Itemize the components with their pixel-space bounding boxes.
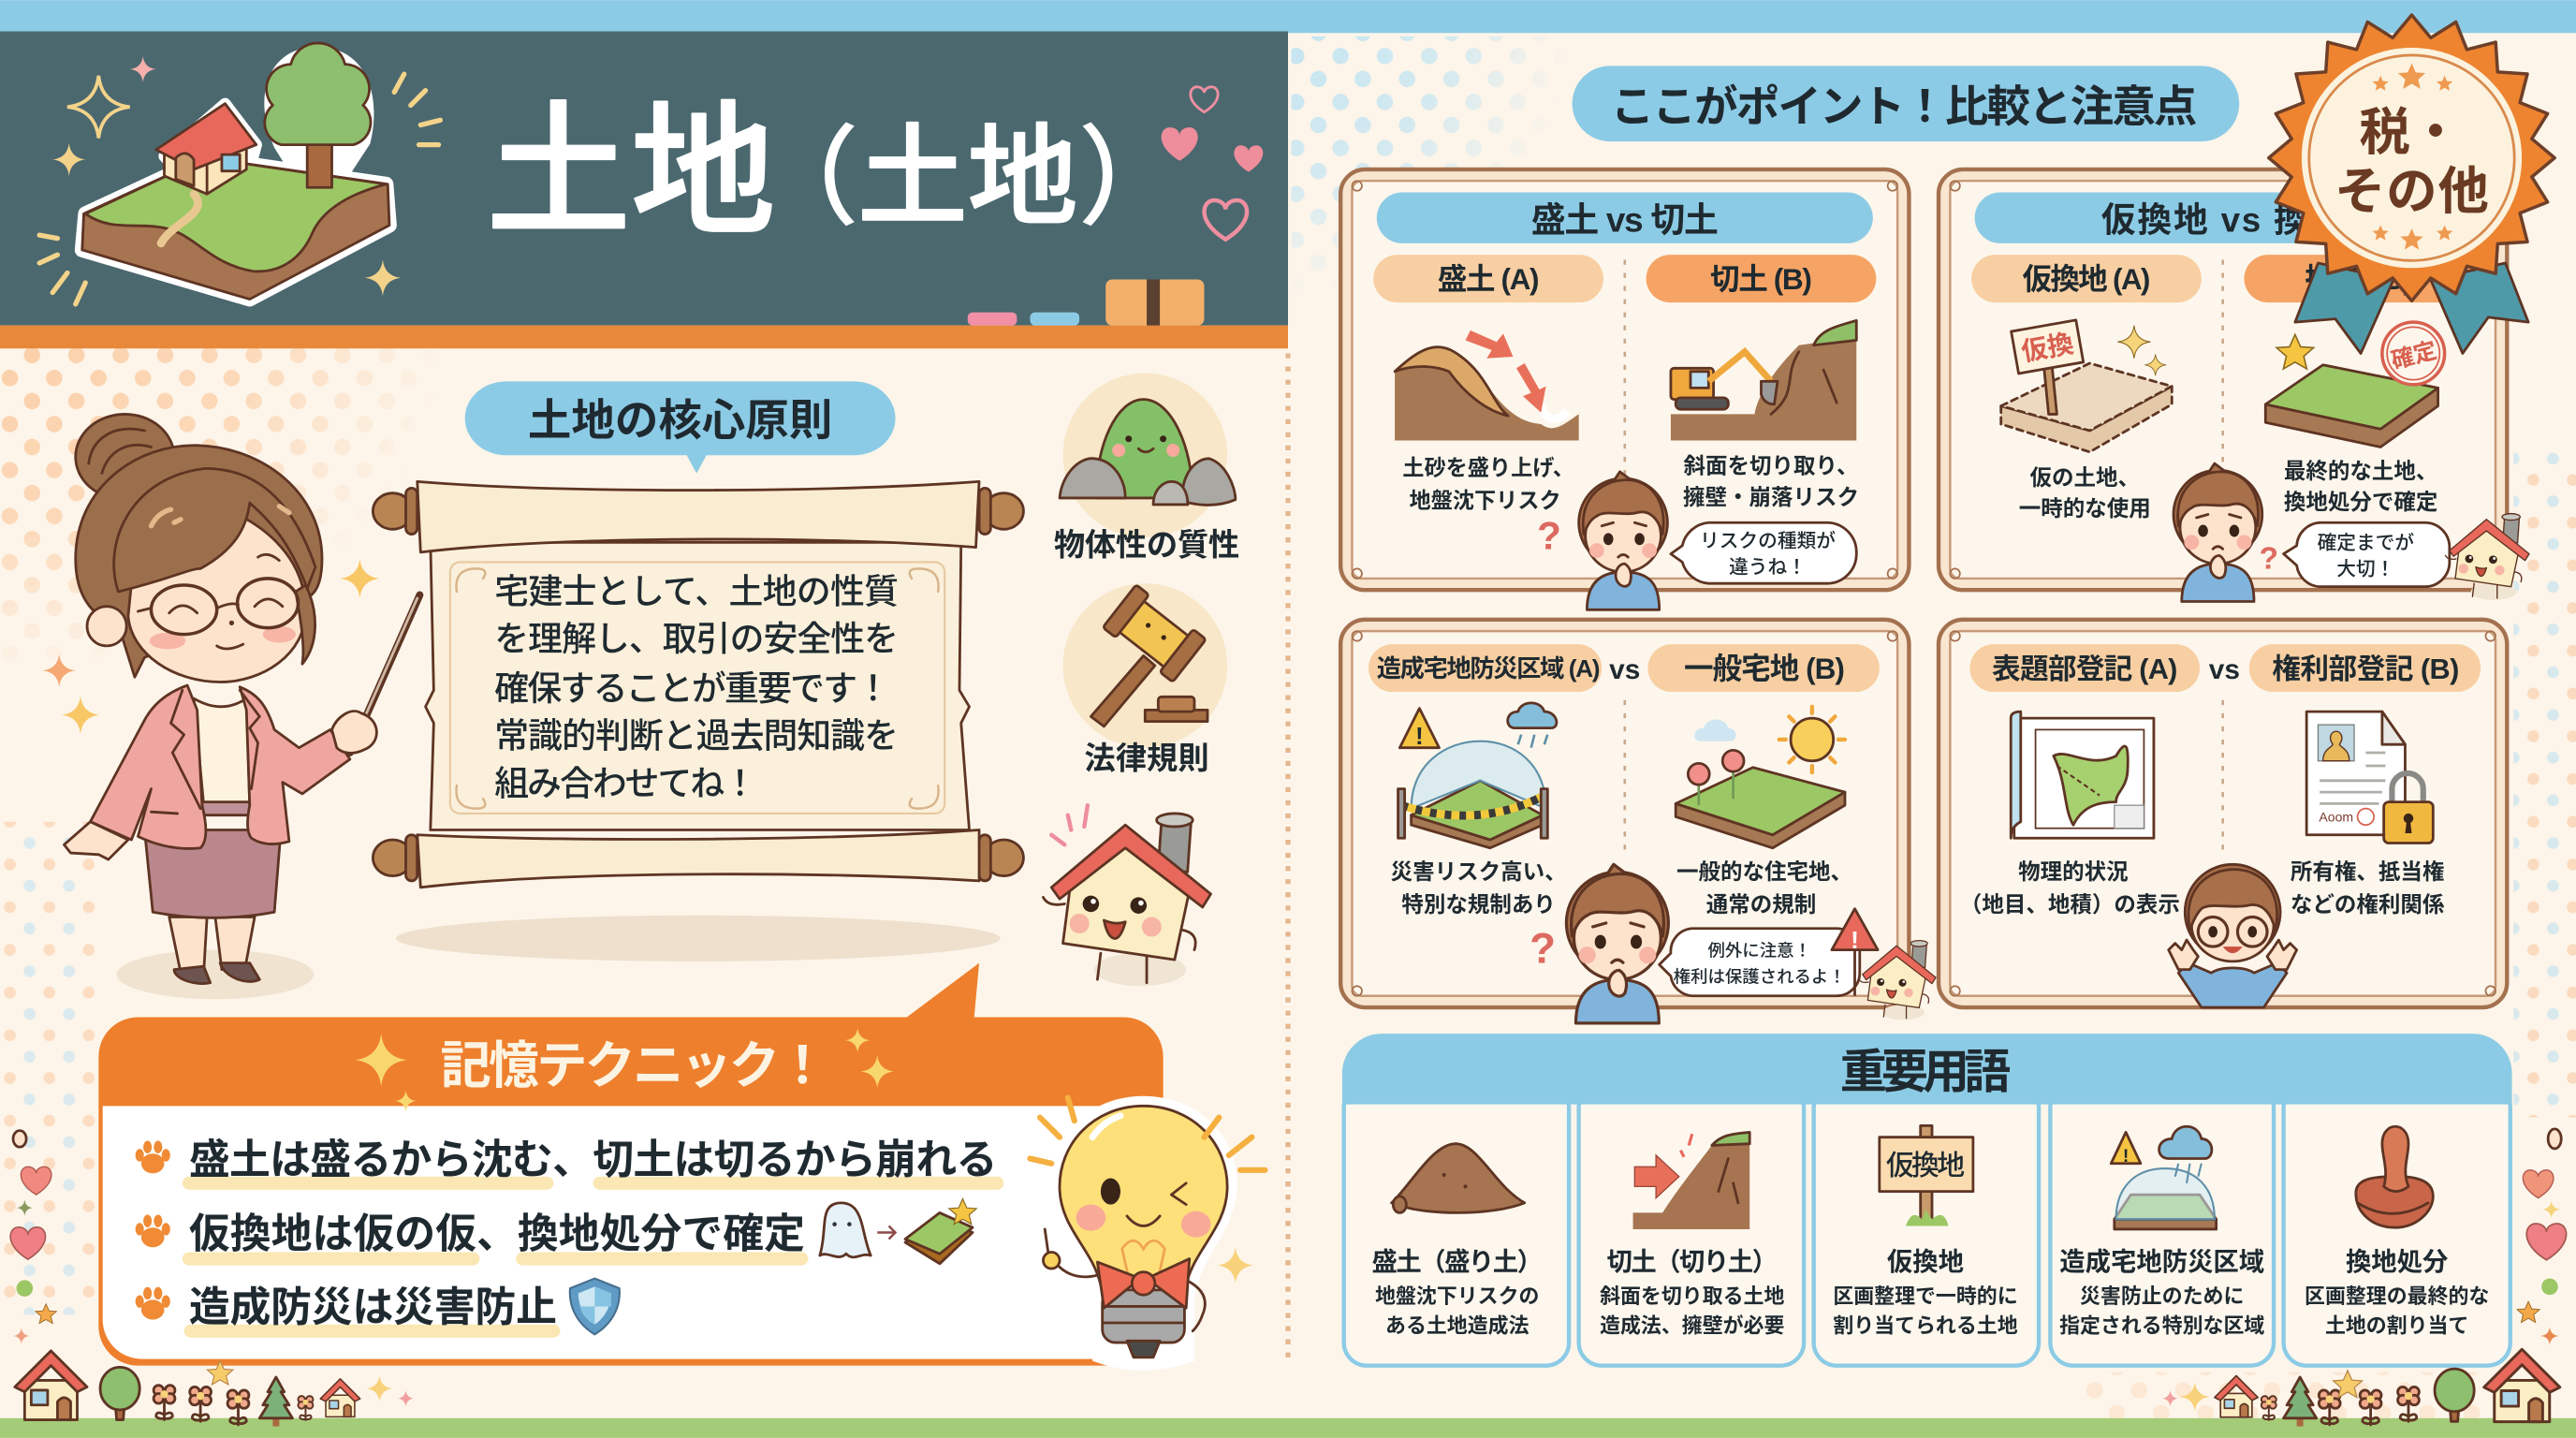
term card: temporary land: 割り当てられる土地	[1833, 1314, 2018, 1338]
text A	[1402, 455, 1574, 512]
badge text: 税・	[2359, 104, 2461, 161]
text A: 一時的な使用	[2019, 496, 2151, 521]
top sky band	[0, 0, 2576, 33]
illustration: land map	[2011, 712, 2154, 838]
scroll shadow	[396, 916, 1001, 961]
chalk eraser	[1105, 280, 1204, 326]
vs: vs	[2209, 654, 2240, 685]
teacher character	[64, 414, 419, 999]
boy thinking card 1	[1537, 472, 1667, 609]
text A: 物理的状況	[2018, 859, 2129, 884]
scroll panel	[373, 481, 1023, 961]
scroll text: 組み合わせてね！	[494, 765, 757, 803]
term card: disaster prevention zone	[2050, 1085, 2274, 1366]
boy thinking card 3	[1530, 864, 1668, 1023]
title: （	[751, 117, 859, 239]
term card: disaster prevention zone: 災害防止のために	[2080, 1284, 2244, 1308]
text A: （地目、地積）の表示	[1960, 892, 2180, 917]
speech bubble card 3	[1660, 929, 1860, 996]
title: 土地	[857, 116, 1077, 239]
text A: 特別な規制あり	[1401, 892, 1556, 917]
option A pill	[1368, 644, 1602, 692]
term card: replotting disposition: 土地の割り当て	[2325, 1314, 2468, 1338]
boy thinking card 2	[2174, 463, 2278, 602]
term card: replotting disposition: 区画整理の最終的な	[2305, 1284, 2489, 1308]
option B pill: 換地 (B)	[2305, 262, 2413, 296]
icon: physical quality mound	[1060, 374, 1236, 537]
option A pill: 表題部登記 (A)	[1992, 653, 2177, 685]
text B: 最終的な土地、	[2284, 459, 2437, 483]
comparison card: landslide zone vs ordinary	[1340, 620, 1909, 1007]
jacket	[64, 685, 376, 859]
mascot card 2	[2445, 514, 2529, 600]
illustration: fill slope	[1395, 330, 1579, 441]
callout title: 記憶テクニック！	[440, 1037, 828, 1094]
mascot: house	[1043, 805, 1211, 986]
illustration: ordinary plot	[1676, 707, 1845, 848]
scroll bottom roll	[373, 829, 1023, 888]
hair bun	[76, 414, 174, 500]
scroll text	[494, 572, 899, 803]
speech bubble: 大切！	[2336, 558, 2394, 580]
text A	[1960, 859, 2180, 917]
fringe and side locks	[114, 468, 315, 664]
scroll text: 常識的判断と過去問知識を	[494, 717, 899, 756]
term card: temporary land: 仮換地	[1886, 1151, 1965, 1181]
text B	[1683, 454, 1859, 509]
chalkboard sparkles and rays	[39, 56, 440, 304]
term card: disaster prevention zone: 造成宅地防災区域	[2059, 1247, 2264, 1276]
icon: shield	[570, 1279, 620, 1334]
tip line 2: 仮換地は仮の仮、換地処分で確定	[189, 1211, 805, 1256]
centre dotted divider	[1286, 353, 1290, 1357]
term card: fill	[1344, 1085, 1569, 1366]
warning sign and mascot card 3	[1832, 909, 1936, 1020]
label: physical quality: 物体性の質性	[1054, 528, 1239, 563]
glasses	[138, 554, 299, 649]
illustration: protected zone dome: !	[1415, 722, 1424, 750]
panel header: 重要用語	[1840, 1046, 2011, 1098]
illustration: temporary plot with sign: 仮換	[2019, 329, 2076, 367]
text B: 通常の規制	[1706, 892, 1816, 917]
legs and shoes	[169, 917, 259, 984]
term card: temporary land: 仮換地	[1887, 1247, 1964, 1276]
key terms panel	[1342, 1034, 2512, 1366]
term card: cut: 造成法、擁壁が必要	[1600, 1314, 1784, 1338]
text B	[2284, 459, 2437, 514]
text A	[1391, 859, 1567, 917]
comparison card: fill vs cut	[1340, 169, 1909, 590]
text A	[2019, 465, 2151, 521]
icon: law gavel	[1063, 583, 1227, 748]
warning sign and mascot card 3: !	[1851, 926, 1859, 954]
boy thinking card 3: ?	[1530, 925, 1556, 973]
background dots: right column	[2513, 444, 2576, 1118]
comparison card: temporary vs replotted land	[1939, 169, 2507, 590]
illustration: temporary plot with sign	[2001, 320, 2172, 452]
tip line 3: 造成防災は災害防止	[189, 1284, 557, 1330]
term card: disaster prevention zone: 指定される特別な区域	[2059, 1314, 2264, 1338]
term card: cut	[1579, 1085, 1804, 1366]
label: law rules: 法律規則	[1084, 742, 1209, 777]
comparison card: register sections	[1939, 620, 2507, 1007]
scroll top roll	[373, 481, 1023, 552]
option B pill	[1647, 644, 1880, 692]
card header	[1377, 192, 1873, 243]
face	[128, 509, 305, 682]
illustration: rights document: Aoom	[2319, 810, 2353, 825]
illustration: protected zone dome	[1398, 703, 1557, 848]
heading: core principle pill	[465, 381, 896, 474]
option B pill	[2249, 644, 2481, 692]
term card: fill: 地盤沈下リスクの	[1375, 1284, 1539, 1308]
title	[487, 91, 1186, 253]
heading: core principle pill: 土地の核心原則	[528, 396, 832, 445]
illustration: rights document	[2306, 712, 2433, 844]
header chalkboard	[0, 31, 1288, 348]
pointer stick	[350, 594, 419, 753]
text A: 土砂を盛り上げ、	[1402, 455, 1574, 479]
scroll text: 確保することが重要です！	[494, 669, 890, 708]
scroll text: 宅建士として、土地の性質	[494, 572, 899, 610]
speech bubble card 3: 権利は保護されるよ！	[1674, 967, 1846, 987]
term card: fill: 盛土（盛り土）	[1372, 1247, 1543, 1276]
option A pill	[1971, 255, 2202, 302]
term card: fill: ある土地造成法	[1385, 1314, 1530, 1338]
footer decoration right	[2162, 1349, 2560, 1427]
badge stars	[2373, 64, 2452, 249]
card header: 仮換地 vs 換地	[2101, 201, 2345, 240]
background dots: top left	[2, 348, 410, 650]
title: ）	[1077, 117, 1186, 239]
text B: 換地処分で確定	[2284, 490, 2437, 514]
option A pill: 盛土 (A)	[1438, 262, 1540, 296]
card header	[1975, 192, 2471, 243]
background dots: bottom right	[2086, 1372, 2481, 1418]
option A pill	[1969, 644, 2200, 692]
text A: 仮の土地、	[2029, 465, 2140, 490]
term card: replotting disposition	[2284, 1085, 2510, 1366]
icon: ghost to land	[820, 1198, 976, 1264]
badge text	[2334, 104, 2489, 220]
title: 土地	[487, 91, 775, 253]
speech bubble: 確定までが	[2318, 532, 2414, 553]
term card: disaster prevention zone: !	[2123, 1147, 2129, 1167]
option B pill: 一般宅地 (B)	[1684, 652, 1845, 685]
illustration: final plot with stamp: 確定	[2389, 337, 2439, 374]
text B: などの権利関係	[2291, 892, 2445, 917]
skirt	[144, 829, 281, 917]
text B: 擁壁・崩落リスク	[1683, 485, 1859, 509]
panel header	[1342, 1034, 2512, 1105]
term card: cut: 斜面を切り取る土地	[1600, 1284, 1784, 1308]
speech bubble	[1671, 522, 1856, 583]
section heading: point comparison: ここがポイント！比較と注意点	[1611, 82, 2197, 131]
background dots: top right	[1292, 36, 1546, 271]
option B pill	[1647, 255, 1876, 302]
cheeks	[150, 626, 296, 649]
term card: cut: 切土（切り土）	[1606, 1247, 1778, 1276]
text B: 一般的な住宅地、	[1676, 859, 1852, 884]
ribbon tails	[2295, 263, 2528, 353]
text A: 地盤沈下リスク	[1410, 488, 1561, 512]
option A pill: 造成宅地防災区域 (A)	[1377, 654, 1600, 682]
text B	[1676, 859, 1852, 917]
background dots: left column	[0, 822, 95, 1314]
option B pill	[2244, 255, 2476, 302]
back hair	[76, 446, 322, 677]
scroll text: を理解し、取引の安全性を	[494, 620, 899, 658]
icon: land with house and tree	[82, 43, 389, 300]
vs: vs	[1609, 654, 1640, 685]
text B: 所有権、抵当権	[2291, 859, 2444, 884]
blouse	[194, 698, 250, 805]
term card: temporary land: 区画整理で一時的に	[1833, 1284, 2018, 1308]
boy with glasses card 4	[2169, 864, 2297, 1007]
option A pill	[1373, 255, 1603, 302]
boy thinking card 1: ?	[1537, 513, 1561, 557]
option A pill: 仮換地 (A)	[2023, 262, 2150, 296]
boy thinking card 2: ?	[2260, 541, 2278, 576]
option B pill: 切土 (B)	[1710, 262, 1812, 296]
illustration: final plot with stamp	[2265, 322, 2445, 448]
starburst	[2269, 15, 2554, 301]
footer decoration left	[15, 1351, 414, 1427]
teacher sparkles	[43, 559, 379, 734]
ear	[87, 607, 126, 646]
text A: 災害リスク高い、	[1391, 859, 1567, 884]
card header: 盛土 vs 切土	[1531, 201, 1719, 240]
scroll body	[426, 542, 970, 829]
side decorations left	[10, 1131, 56, 1344]
memory technique callout	[98, 963, 1164, 1366]
text B: 斜面を切り取り、	[1683, 454, 1859, 478]
illustration: excavator and cut slope	[1671, 320, 1856, 441]
option B pill: 権利部登記 (B)	[2272, 653, 2459, 685]
bottom grass band	[0, 1418, 2576, 1438]
tip line 1: 盛土は盛るから沈む、切土は切るから崩れる	[189, 1137, 997, 1182]
chalkboard hearts	[1162, 87, 1263, 240]
highlight underlines	[183, 1177, 1003, 1338]
speech bubble: 違うね！	[1729, 557, 1807, 579]
callout title	[355, 1028, 894, 1111]
badge text: その他	[2334, 163, 2489, 220]
light bulb character	[1030, 1098, 1265, 1366]
speech bubble: リスクの種類が	[1700, 531, 1836, 552]
side decorations right	[2517, 1129, 2567, 1345]
speech bubble	[2284, 522, 2450, 587]
text B	[2291, 859, 2445, 917]
term card: temporary land	[1814, 1085, 2039, 1366]
section heading: point comparison	[1573, 66, 2239, 141]
speech bubble card 3: 例外に注意！	[1707, 941, 1811, 961]
badge: tax and others	[2269, 15, 2554, 353]
term card: replotting disposition: 換地処分	[2346, 1247, 2448, 1276]
scroll corner ornaments	[456, 568, 939, 809]
chalk sticks	[968, 313, 1079, 326]
